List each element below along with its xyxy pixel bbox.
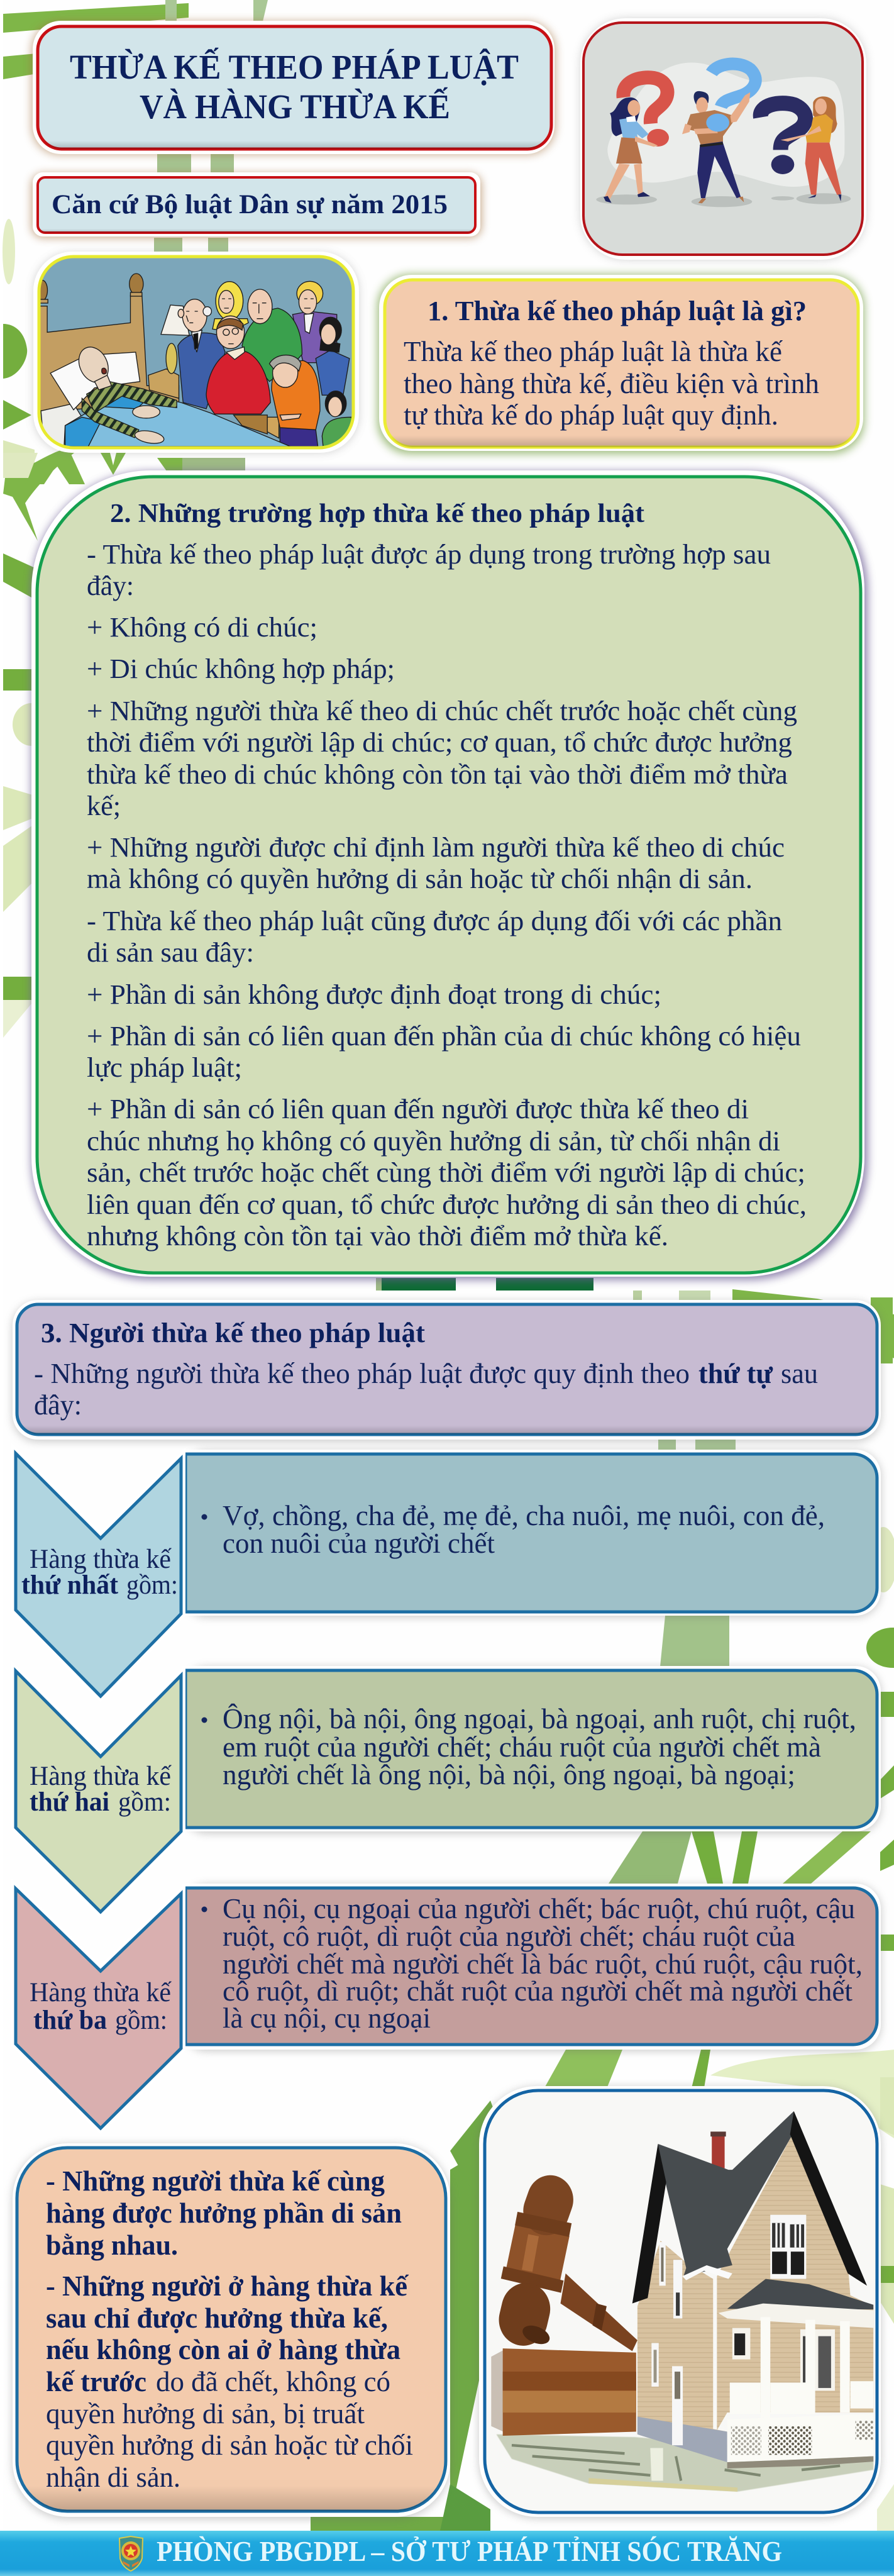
panel: inheritance share notes: quyền hưởng di sản, bị truất bbox=[46, 2397, 365, 2429]
first rank label bbox=[21, 1545, 178, 1600]
first rank label: Hàng thừa kế bbox=[30, 1545, 172, 1574]
content box: first rank bbox=[182, 1450, 881, 1617]
footer text: PHÒNG PBGDPL – SỞ TƯ PHÁP TỈNH SÓC TRĂNG bbox=[157, 2535, 782, 2567]
panel 3 intro text: đây: bbox=[34, 1389, 82, 1421]
panel 2 body text: kế; bbox=[87, 791, 121, 821]
panel 1 body: theo hàng thừa kế, điều kiện và trình bbox=[404, 368, 819, 399]
first-rank row bbox=[16, 1450, 881, 1696]
title line 2: VÀ HÀNG THỪA KẾ bbox=[140, 87, 450, 126]
panel 2 body text: di sản sau đây: bbox=[87, 937, 254, 968]
panel: inheritance share notes: quyền hưởng di sản hoặc từ chối bbox=[46, 2429, 413, 2461]
panel 2 body text: nhưng không còn tồn tại vào thời điểm mở thừa kế. bbox=[87, 1221, 668, 1252]
panel 2 heading: 2. Những trường hợp thừa kế theo pháp luật bbox=[110, 499, 644, 528]
third rank label: Hàng thừa kế bbox=[30, 1978, 172, 2007]
content box: second rank bbox=[182, 1666, 881, 1833]
second rank label bbox=[30, 1762, 172, 1817]
panel 2 body text: thừa kế theo di chúc không còn tồn tại vào thời điểm mở thừa bbox=[87, 759, 788, 790]
panel 2 body text: + Những người thừa kế theo di chúc chết trước hoặc chết cùng bbox=[87, 696, 797, 726]
title line 1: THỪA KẾ THEO PHÁP LUẬT bbox=[70, 48, 519, 86]
third rank label: thứ ba bbox=[33, 2006, 107, 2035]
subtitle: legal basis: Căn cứ Bộ luật Dân sự năm 2015 bbox=[52, 190, 448, 219]
panel: inheritance share notes: nếu không còn ai ở hàng thừa bbox=[46, 2333, 400, 2365]
arrow chevron: second rank bbox=[16, 1671, 181, 1912]
third-rank row bbox=[16, 1884, 881, 2128]
panel 2 body text: chúc nhưng họ không có quyền hưởng di sản, từ chối nhận di bbox=[87, 1126, 780, 1157]
panel 2 body text: + Những người được chỉ định làm người thừa kế theo di chúc bbox=[87, 832, 785, 863]
footer bar bbox=[0, 2531, 894, 2576]
panel 2 body text: lực pháp luật; bbox=[87, 1052, 242, 1083]
panel 2 body text: + Phần di sản không được định đoạt trong di chúc; bbox=[87, 979, 661, 1010]
panel: inheritance share notes: nhận di sản. bbox=[46, 2461, 180, 2493]
panel: inheritance share notes: bằng nhau. bbox=[46, 2229, 178, 2261]
panel 3 heading: 3. Người thừa kế theo pháp luật bbox=[41, 1318, 425, 1348]
first rank list: Vợ, chồng, cha đẻ, mẹ đẻ, cha nuôi, mẹ nuôi, con đẻ, bbox=[223, 1500, 825, 1531]
panel 2 body text: đây: bbox=[87, 570, 134, 601]
panel 2 body text: + Phần di sản có liên quan đến phần của di chúc không có hiệu bbox=[87, 1021, 801, 1052]
title banner bbox=[31, 21, 556, 155]
second rank list bbox=[201, 1703, 856, 1790]
panel 3 intro text: thứ tự bbox=[698, 1357, 773, 1389]
content box: third rank bbox=[182, 1884, 881, 2051]
first rank label: gồm: bbox=[126, 1570, 178, 1600]
panel 2 body text: thời điểm với người lập di chúc; cơ quan, tổ chức được hưởng bbox=[87, 727, 792, 758]
first rank label: thứ nhất bbox=[21, 1570, 119, 1600]
panel 3 intro text: sau bbox=[781, 1357, 818, 1389]
third rank list bbox=[201, 1893, 863, 2034]
panel: inheritance share notes bbox=[13, 2143, 450, 2519]
panel 2 body text: + Phần di sản có liên quan đến người được thừa kế theo di bbox=[87, 1094, 749, 1124]
arrow chevron: third rank bbox=[16, 1889, 181, 2128]
second rank list: người chết là ông nội, bà nội, ông ngoại, bà ngoại; bbox=[223, 1759, 795, 1790]
third rank label: gồm: bbox=[115, 2006, 167, 2035]
second rank list: Ông nội, bà nội, ông ngoại, bà ngoại, anh ruột, chị ruột, bbox=[223, 1703, 856, 1735]
panel: inheritance share notes: sau chỉ được hưởng thừa kế, bbox=[46, 2302, 388, 2334]
panel 2: cases of legal inheritance bbox=[31, 470, 868, 1280]
panel 1: definition bbox=[377, 274, 864, 454]
first rank list: con nuôi của người chết bbox=[223, 1528, 495, 1559]
subtitle: legal basis bbox=[31, 172, 482, 238]
panel: inheritance share notes: kế trước bbox=[46, 2365, 146, 2397]
picture: people with question marks bbox=[580, 18, 866, 260]
panel 2 body text: - Thừa kế theo pháp luật được áp dụng trong trường hợp sau bbox=[87, 539, 771, 570]
panel 2 body text: sản, chết trước hoặc chết cùng thời điểm với người lập di chúc; bbox=[87, 1157, 805, 1188]
panel 2 body text bbox=[87, 539, 807, 1252]
panel 2 body text: liên quan đến cơ quan, tổ chức được hưởng di sản theo di chúc, bbox=[87, 1189, 807, 1220]
panel 2 body text: - Thừa kế theo pháp luật cũng được áp dụng đối với các phần bbox=[87, 906, 782, 936]
panel: inheritance share notes: - Những người thừa kế cùng bbox=[46, 2165, 385, 2197]
panel 1 heading: 1. Thừa kế theo pháp luật là gì? bbox=[428, 296, 807, 326]
panel 3 intro text bbox=[34, 1357, 818, 1421]
panel 1 body: Thừa kế theo pháp luật là thừa kế bbox=[404, 336, 783, 367]
third rank label bbox=[30, 1978, 172, 2035]
panel 2 body text: + Di chúc không hợp pháp; bbox=[87, 653, 395, 684]
panel 2 body text: + Không có di chúc; bbox=[87, 612, 317, 643]
arrow chevron: first rank bbox=[16, 1453, 181, 1696]
icon: justice emblem bbox=[119, 2536, 143, 2571]
third rank list: người chết mà người chết là bác ruột, chú ruột, cậu ruột, bbox=[223, 1948, 863, 1980]
second rank list: em ruột của người chết; cháu ruột của người chết mà bbox=[223, 1731, 821, 1763]
second rank label: gồm: bbox=[118, 1787, 171, 1817]
third rank list: Cụ nội, cụ ngoại của người chết; bác ruột, chú ruột, cậu bbox=[223, 1893, 855, 1924]
panel 3 intro text: - Những người thừa kế theo pháp luật được quy định theo bbox=[34, 1357, 690, 1389]
third rank list: ruột, cô ruột, dì ruột của người chết; cháu ruột của bbox=[223, 1921, 795, 1952]
third rank list: cô ruột, dì ruột; chắt ruột của người chết mà người chết bbox=[223, 1975, 853, 2007]
panel 1 body: tự thừa kế do pháp luật quy định. bbox=[404, 399, 778, 431]
first rank list bbox=[201, 1500, 825, 1559]
panel 1 body bbox=[404, 336, 819, 431]
picture: family around deathbed bbox=[33, 252, 359, 453]
panel: inheritance share notes: hàng được hưởng phần di sản bbox=[46, 2197, 402, 2229]
panel: inheritance share notes: do đã chết, không có bbox=[156, 2365, 390, 2397]
third rank list: là cụ nội, cụ ngoại bbox=[223, 2002, 431, 2034]
second-rank row bbox=[16, 1666, 881, 1912]
panel 2 body text: mà không có quyền hưởng di sản hoặc từ chối nhận di sản. bbox=[87, 863, 753, 894]
second rank label: thứ hai bbox=[30, 1787, 109, 1817]
panel 3: heirs header bbox=[13, 1300, 881, 1441]
second rank label: Hàng thừa kế bbox=[30, 1762, 172, 1791]
panel: inheritance share notes: - Những người ở hàng thừa kế bbox=[46, 2270, 409, 2302]
picture: gavel and house on money bbox=[479, 2086, 881, 2518]
